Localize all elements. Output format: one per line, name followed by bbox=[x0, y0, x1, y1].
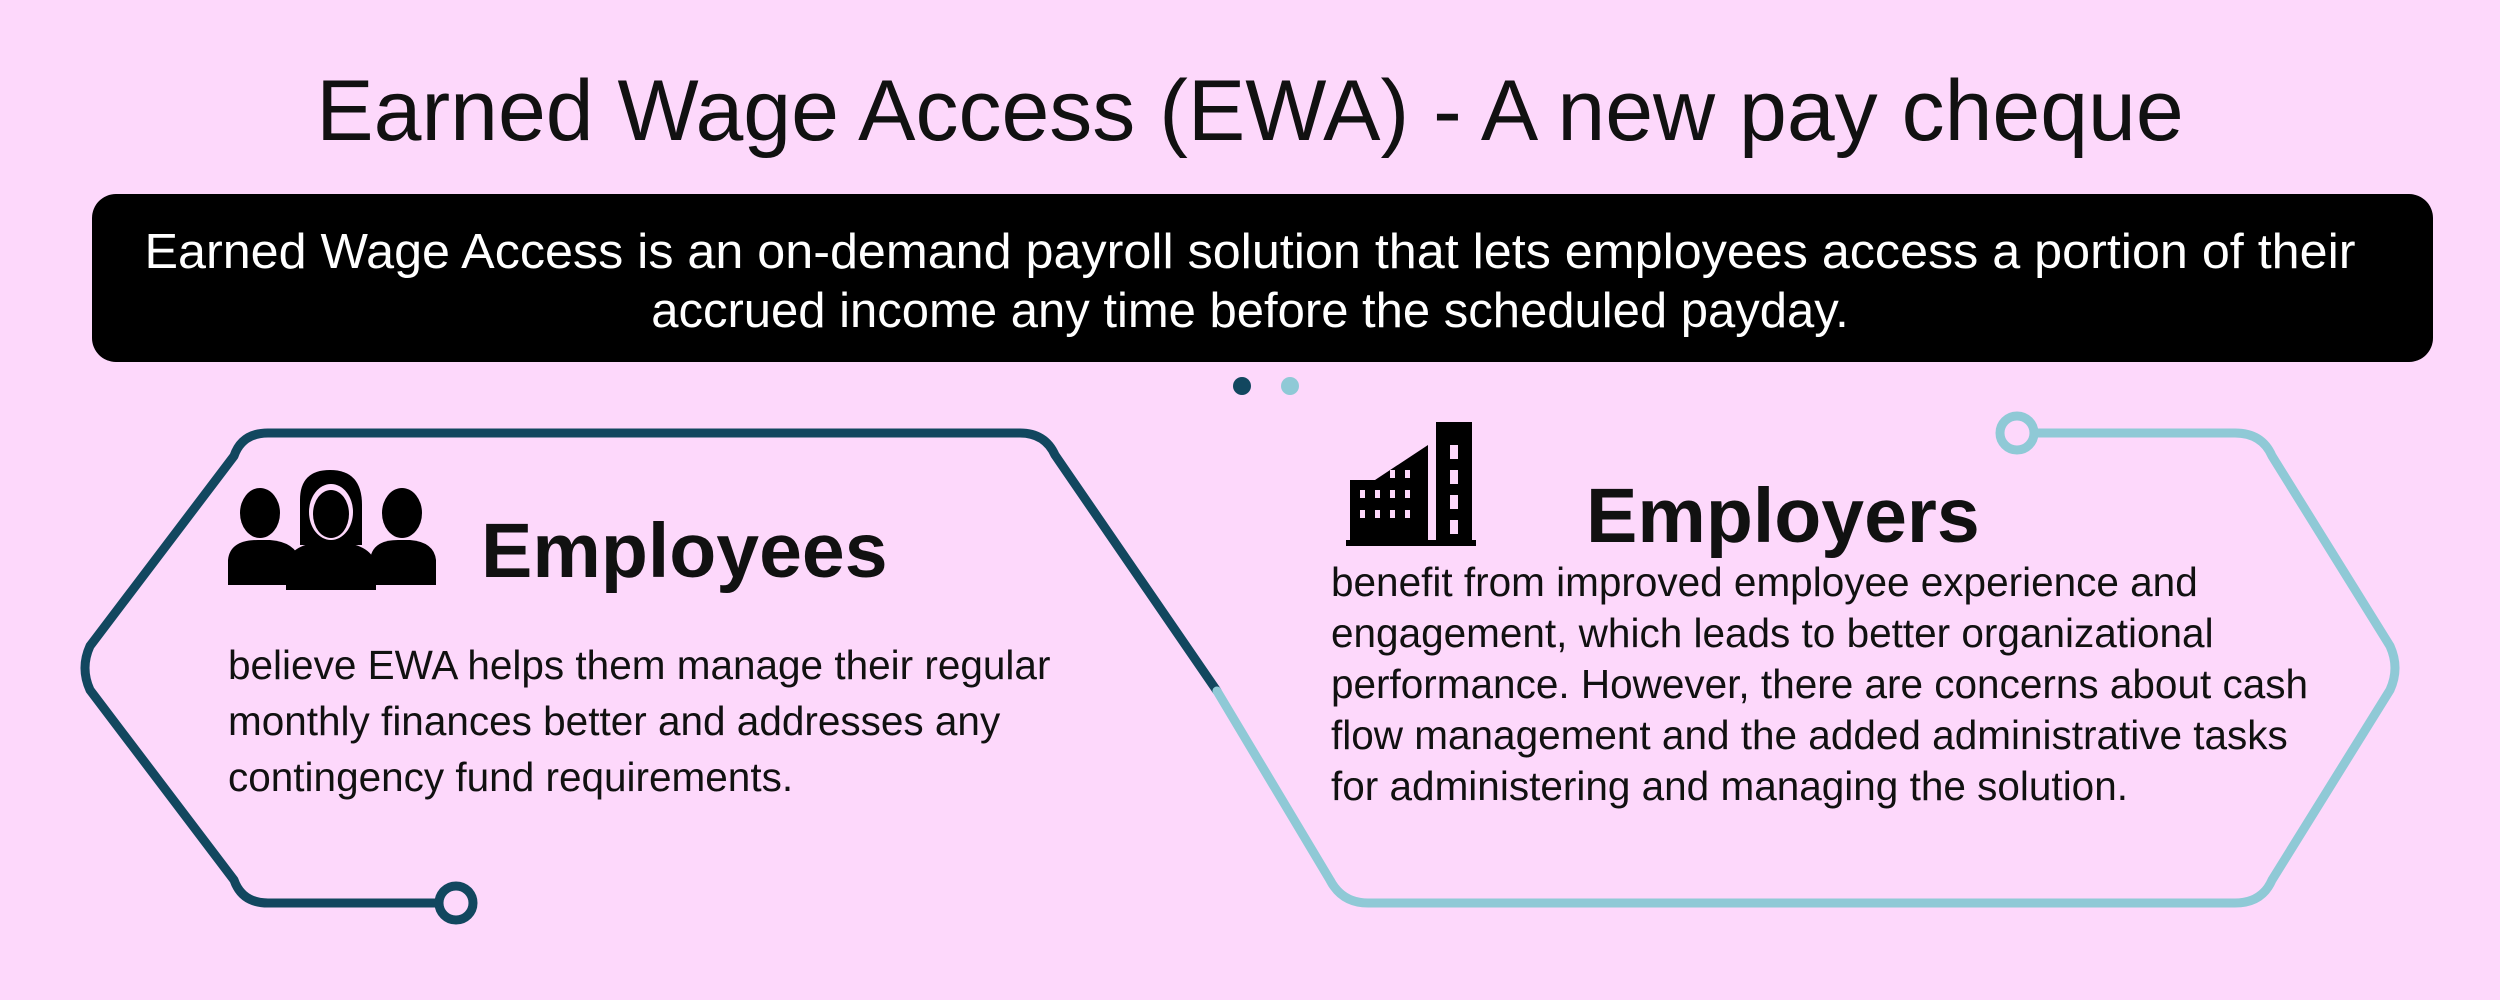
text: employers body bbox=[1331, 559, 2308, 809]
heading: Employees: Employees bbox=[481, 508, 888, 594]
title: Earned Wage Access (EWA) - A new pay cheque bbox=[316, 63, 2184, 159]
definition banner: Earned Wage Access is an on-demand payroll solution that lets employees access a portion of their bbox=[144, 225, 2356, 279]
panel: employees frame bbox=[85, 433, 1217, 920]
text: employees body: monthly finances better and addresses any bbox=[228, 698, 1001, 744]
pager dots bbox=[1233, 377, 1299, 395]
panel: employers frame bbox=[1217, 416, 2395, 903]
text: employers body: flow management and the added administrative tasks bbox=[1331, 712, 2288, 758]
definition banner bbox=[92, 194, 2433, 362]
icon: building bbox=[1346, 422, 1476, 546]
definition banner: accrued income any time before the scheduled payday. bbox=[651, 284, 1849, 338]
text: employees body bbox=[228, 642, 1050, 800]
text: employers body: engagement, which leads to better organizational bbox=[1331, 610, 2214, 656]
icon: employees group bbox=[228, 470, 436, 590]
text: employees body: believe EWA helps them manage their regular bbox=[228, 642, 1050, 688]
heading: Employers: Employers bbox=[1586, 473, 1980, 559]
text: employers body: benefit from improved employee experience and bbox=[1331, 559, 2198, 605]
text: employers body: performance. However, there are concerns about cash bbox=[1331, 661, 2308, 707]
text: employees body: contingency fund requirements. bbox=[228, 754, 793, 800]
text: employers body: for administering and managing the solution. bbox=[1331, 763, 2128, 809]
